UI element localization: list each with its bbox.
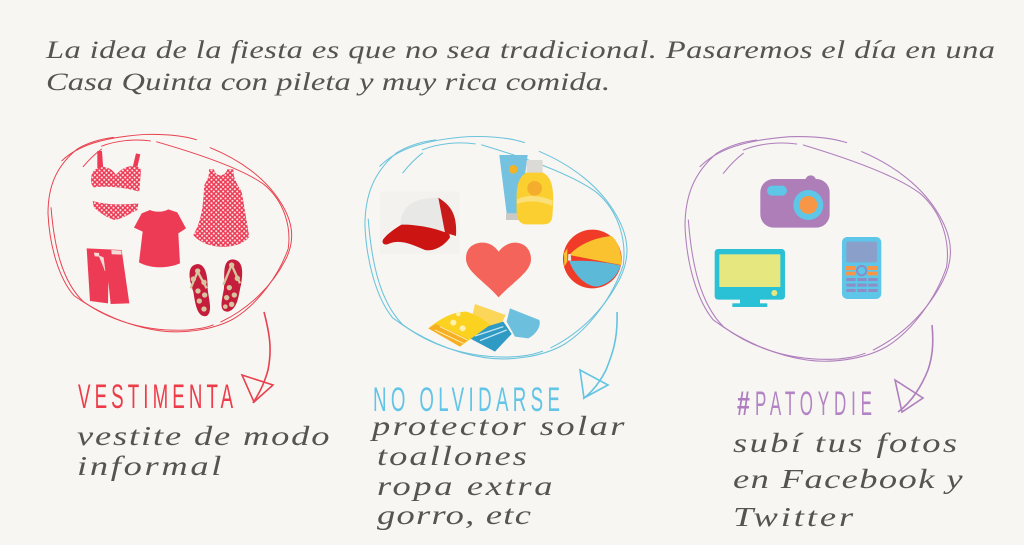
arrow: red (242, 312, 273, 403)
icon: t-shirt (134, 209, 186, 267)
text: vestimenta body: informal (77, 451, 222, 481)
text: vestimenta body (77, 421, 329, 481)
text: patoydie body: subí tus fotos (733, 428, 957, 458)
text: patoydie body (733, 428, 963, 532)
text: no olvidarse body: gorro, etc (377, 500, 531, 530)
intro text: La idea de la fiesta es que no sea tradicional. Pasaremos el día en una (45, 36, 995, 64)
intro text: Casa Quinta con pileta y muy rica comida. (46, 68, 610, 96)
icon: camera (760, 175, 830, 228)
text: no olvidarse body: protector solar (370, 411, 625, 441)
panel: no olvidarse (365, 136, 627, 530)
beach icons (380, 155, 622, 352)
icon: heart (466, 243, 531, 297)
icon: monitor (715, 249, 785, 307)
icon: cap (380, 192, 459, 254)
icon: bikini (91, 151, 141, 220)
sketched circle: purple (685, 137, 950, 361)
heading: vestimenta: VESTIMENTA (78, 377, 234, 415)
clothing icons (87, 151, 249, 316)
sketched circle: red (48, 134, 292, 332)
sketched circle: blue (365, 136, 627, 359)
icon: shorts (87, 248, 129, 304)
icon: phone (842, 237, 881, 299)
intro text (45, 36, 995, 96)
arrow: blue (580, 312, 617, 399)
heading: patoydie: PATOYDIE (755, 385, 872, 423)
heading: patoydie: # (737, 386, 750, 423)
text: no olvidarse body: toallones (377, 441, 527, 471)
panel: vestimenta (48, 134, 329, 481)
arrow: purple (895, 325, 933, 412)
icon: sunscreen (499, 155, 553, 224)
device icons (715, 175, 881, 307)
text: patoydie body: en Facebook y (733, 464, 963, 494)
text: no olvidarse body (370, 411, 625, 530)
text: patoydie body: Twitter (733, 502, 854, 532)
icon: beach ball (563, 230, 622, 288)
heading: no olvidarse: NO OLVIDARSE (373, 380, 560, 418)
icon: towels (428, 304, 540, 352)
text: vestimenta body: vestite de modo (77, 421, 329, 451)
icon: dress (193, 169, 249, 247)
panel: patoydie (685, 137, 963, 532)
icon: flip flops (190, 259, 242, 316)
text: no olvidarse body: ropa extra (377, 471, 553, 501)
